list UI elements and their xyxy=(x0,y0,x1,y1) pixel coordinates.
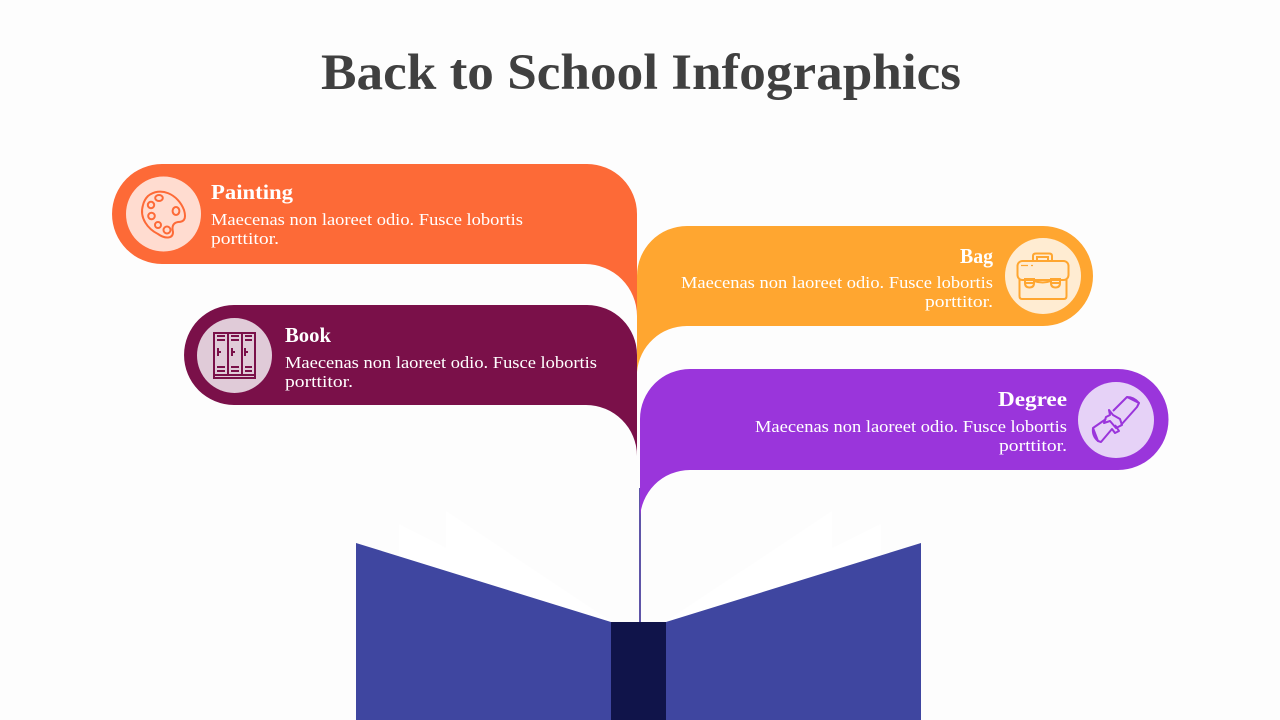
book right cover xyxy=(666,543,921,720)
icon circle: degree xyxy=(1078,382,1154,458)
panel: degree xyxy=(640,369,1168,520)
panel: bag xyxy=(637,226,1093,372)
book banner xyxy=(184,305,637,456)
book pages xyxy=(399,511,881,622)
icon: briefcase xyxy=(1018,254,1068,299)
panel: book xyxy=(184,305,637,456)
degree text: porttitor. xyxy=(999,436,1067,455)
book text: porttitor. xyxy=(285,372,353,391)
degree banner xyxy=(640,369,1168,520)
book left cover xyxy=(356,543,611,720)
bag text: porttitor. xyxy=(925,292,993,311)
painting text: Maecenas non laoreet odio. Fusce lobortis xyxy=(211,210,523,229)
open book illustration xyxy=(356,488,921,720)
degree text: Maecenas non laoreet odio. Fusce lobortis xyxy=(755,417,1067,436)
icon circle: book xyxy=(197,318,272,393)
icon: lockers xyxy=(214,333,255,378)
bag heading: Bag xyxy=(960,244,993,268)
book stem xyxy=(639,488,641,623)
icon circle: bag xyxy=(1005,238,1081,314)
degree heading: Degree xyxy=(998,387,1067,411)
painting banner xyxy=(112,164,637,316)
title: Back to School Infographics xyxy=(321,45,961,101)
icon: palette xyxy=(142,192,185,238)
icon: diploma scroll xyxy=(1093,397,1139,442)
panel: painting xyxy=(112,164,637,316)
book spine xyxy=(611,622,666,720)
bag text: Maecenas non laoreet odio. Fusce lobortis xyxy=(681,273,993,292)
painting heading: Painting xyxy=(211,180,294,204)
bag banner xyxy=(637,226,1093,372)
book heading: Book xyxy=(285,323,331,347)
painting text: porttitor. xyxy=(211,229,279,248)
icon circle: painting xyxy=(126,176,201,252)
book text: Maecenas non laoreet odio. Fusce lobortis xyxy=(285,353,597,372)
